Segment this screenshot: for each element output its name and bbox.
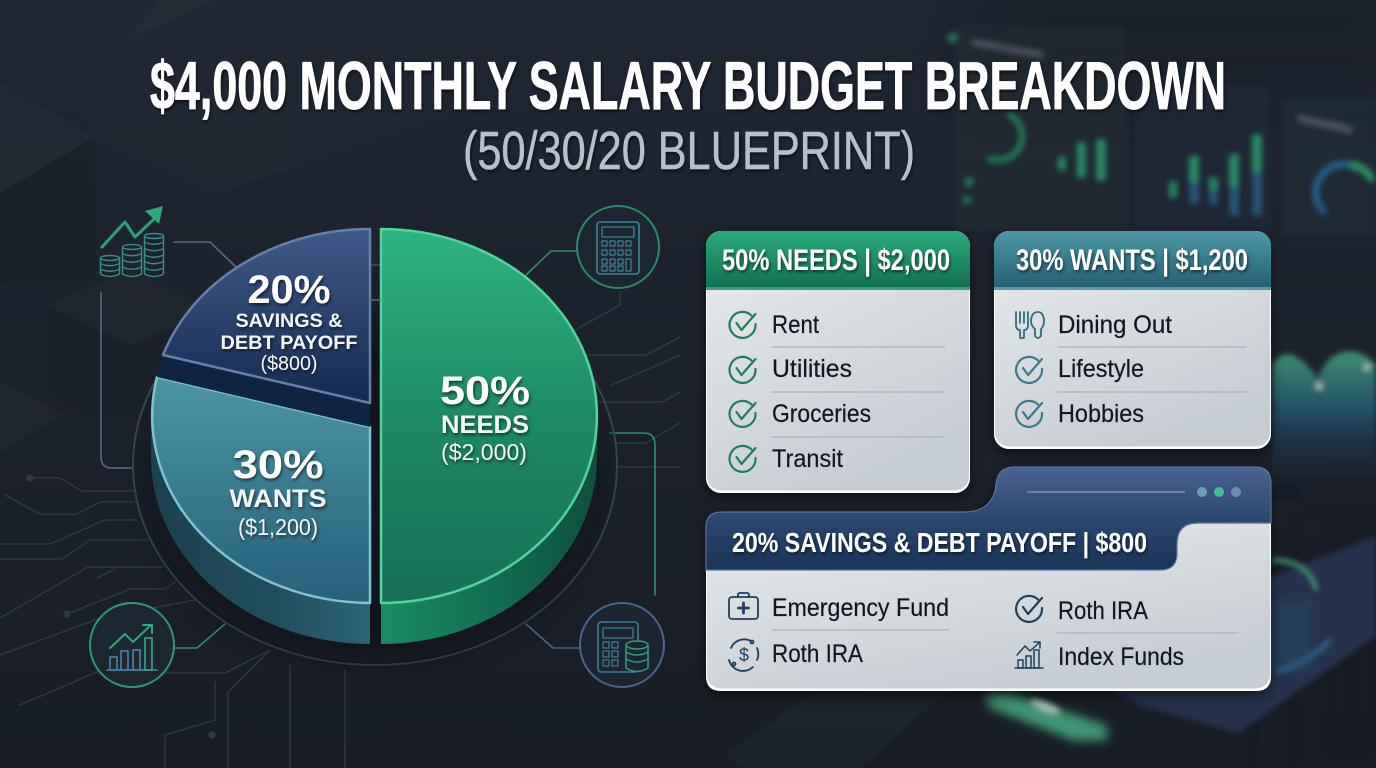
needs list: Utilities [772,355,852,383]
needs card shell [706,231,970,493]
savings list: Roth IRA [772,640,863,668]
savings list: Index Funds [1058,643,1184,671]
pie chart [133,229,617,665]
icon: check utilities [730,357,756,383]
blurred dashboard backdrop [947,25,1376,741]
icon: calculator badge [577,206,659,288]
icon: first aid case [729,593,758,619]
needs list [730,311,945,473]
panel: savings and debt payoff [706,467,1271,691]
icon: fork and spoon [1016,312,1044,338]
savings card shell [706,467,1271,691]
pie base ring [133,265,617,665]
pie label: needs: 50% [440,369,530,413]
icon: dollar cycle: $ [739,645,749,665]
panel: wants [994,231,1271,449]
icon: bar chart badge [90,603,174,687]
icon: index chart [1015,642,1043,668]
circuit traces [0,292,680,768]
wants list: Dining Out [1058,311,1172,339]
savings list [729,593,1238,671]
pie label: savings: SAVINGS & [236,311,343,332]
needs list: Rent [772,311,819,339]
wants list: Hobbies [1058,400,1144,428]
pie label: wants: WANTS [230,485,326,513]
slice: savings 20% [157,229,370,427]
slice: wants 30% [151,377,370,644]
icon: check transit [730,446,756,472]
connector lines [101,242,655,648]
pie label: wants [230,443,326,540]
pie label: wants: 30% [232,443,324,487]
window dots [1197,487,1241,497]
icon: check groceries [730,401,756,427]
wants card shell [994,231,1271,449]
pie label: savings: 20% [248,268,330,312]
needs list: Transit [772,445,843,473]
icon: coins with rising arrow [100,206,164,276]
needs header [706,231,970,290]
pie label: needs: NEEDS [441,411,529,439]
wants list: Lifestyle [1058,355,1144,383]
icon: check rent [730,312,756,338]
needs list: Groceries [772,400,871,428]
pie label: savings [220,268,358,375]
subtitle: (50/30/20 BLUEPRINT) [463,121,915,181]
savings header tab [706,467,1271,570]
icon: check hobbies [1016,401,1042,427]
pie label: savings: DEBT PAYOFF [220,333,358,354]
savings list: Roth IRA [1058,597,1148,625]
pie label: savings: ($800) [260,353,318,375]
wants header: 30% WANTS | $1,200 [1016,244,1248,277]
icon: calculator and coins badge [580,603,664,687]
icon: dollar cycle [729,639,758,671]
pie label: wants: ($1,200) [238,514,318,540]
wants header [994,231,1271,290]
savings list: Emergency Fund [772,594,949,622]
savings header tab: 20% SAVINGS & DEBT PAYOFF | $800 [732,527,1147,558]
pie label: needs: ($2,000) [441,439,527,465]
icon: check roth [1016,596,1042,622]
needs header: 50% NEEDS | $2,000 [722,244,950,277]
wants list [1016,311,1246,428]
pie label: needs [440,369,530,465]
icon: check lifestyle [1016,357,1042,383]
slice: needs 50% [381,229,597,644]
panel: needs [706,231,970,493]
